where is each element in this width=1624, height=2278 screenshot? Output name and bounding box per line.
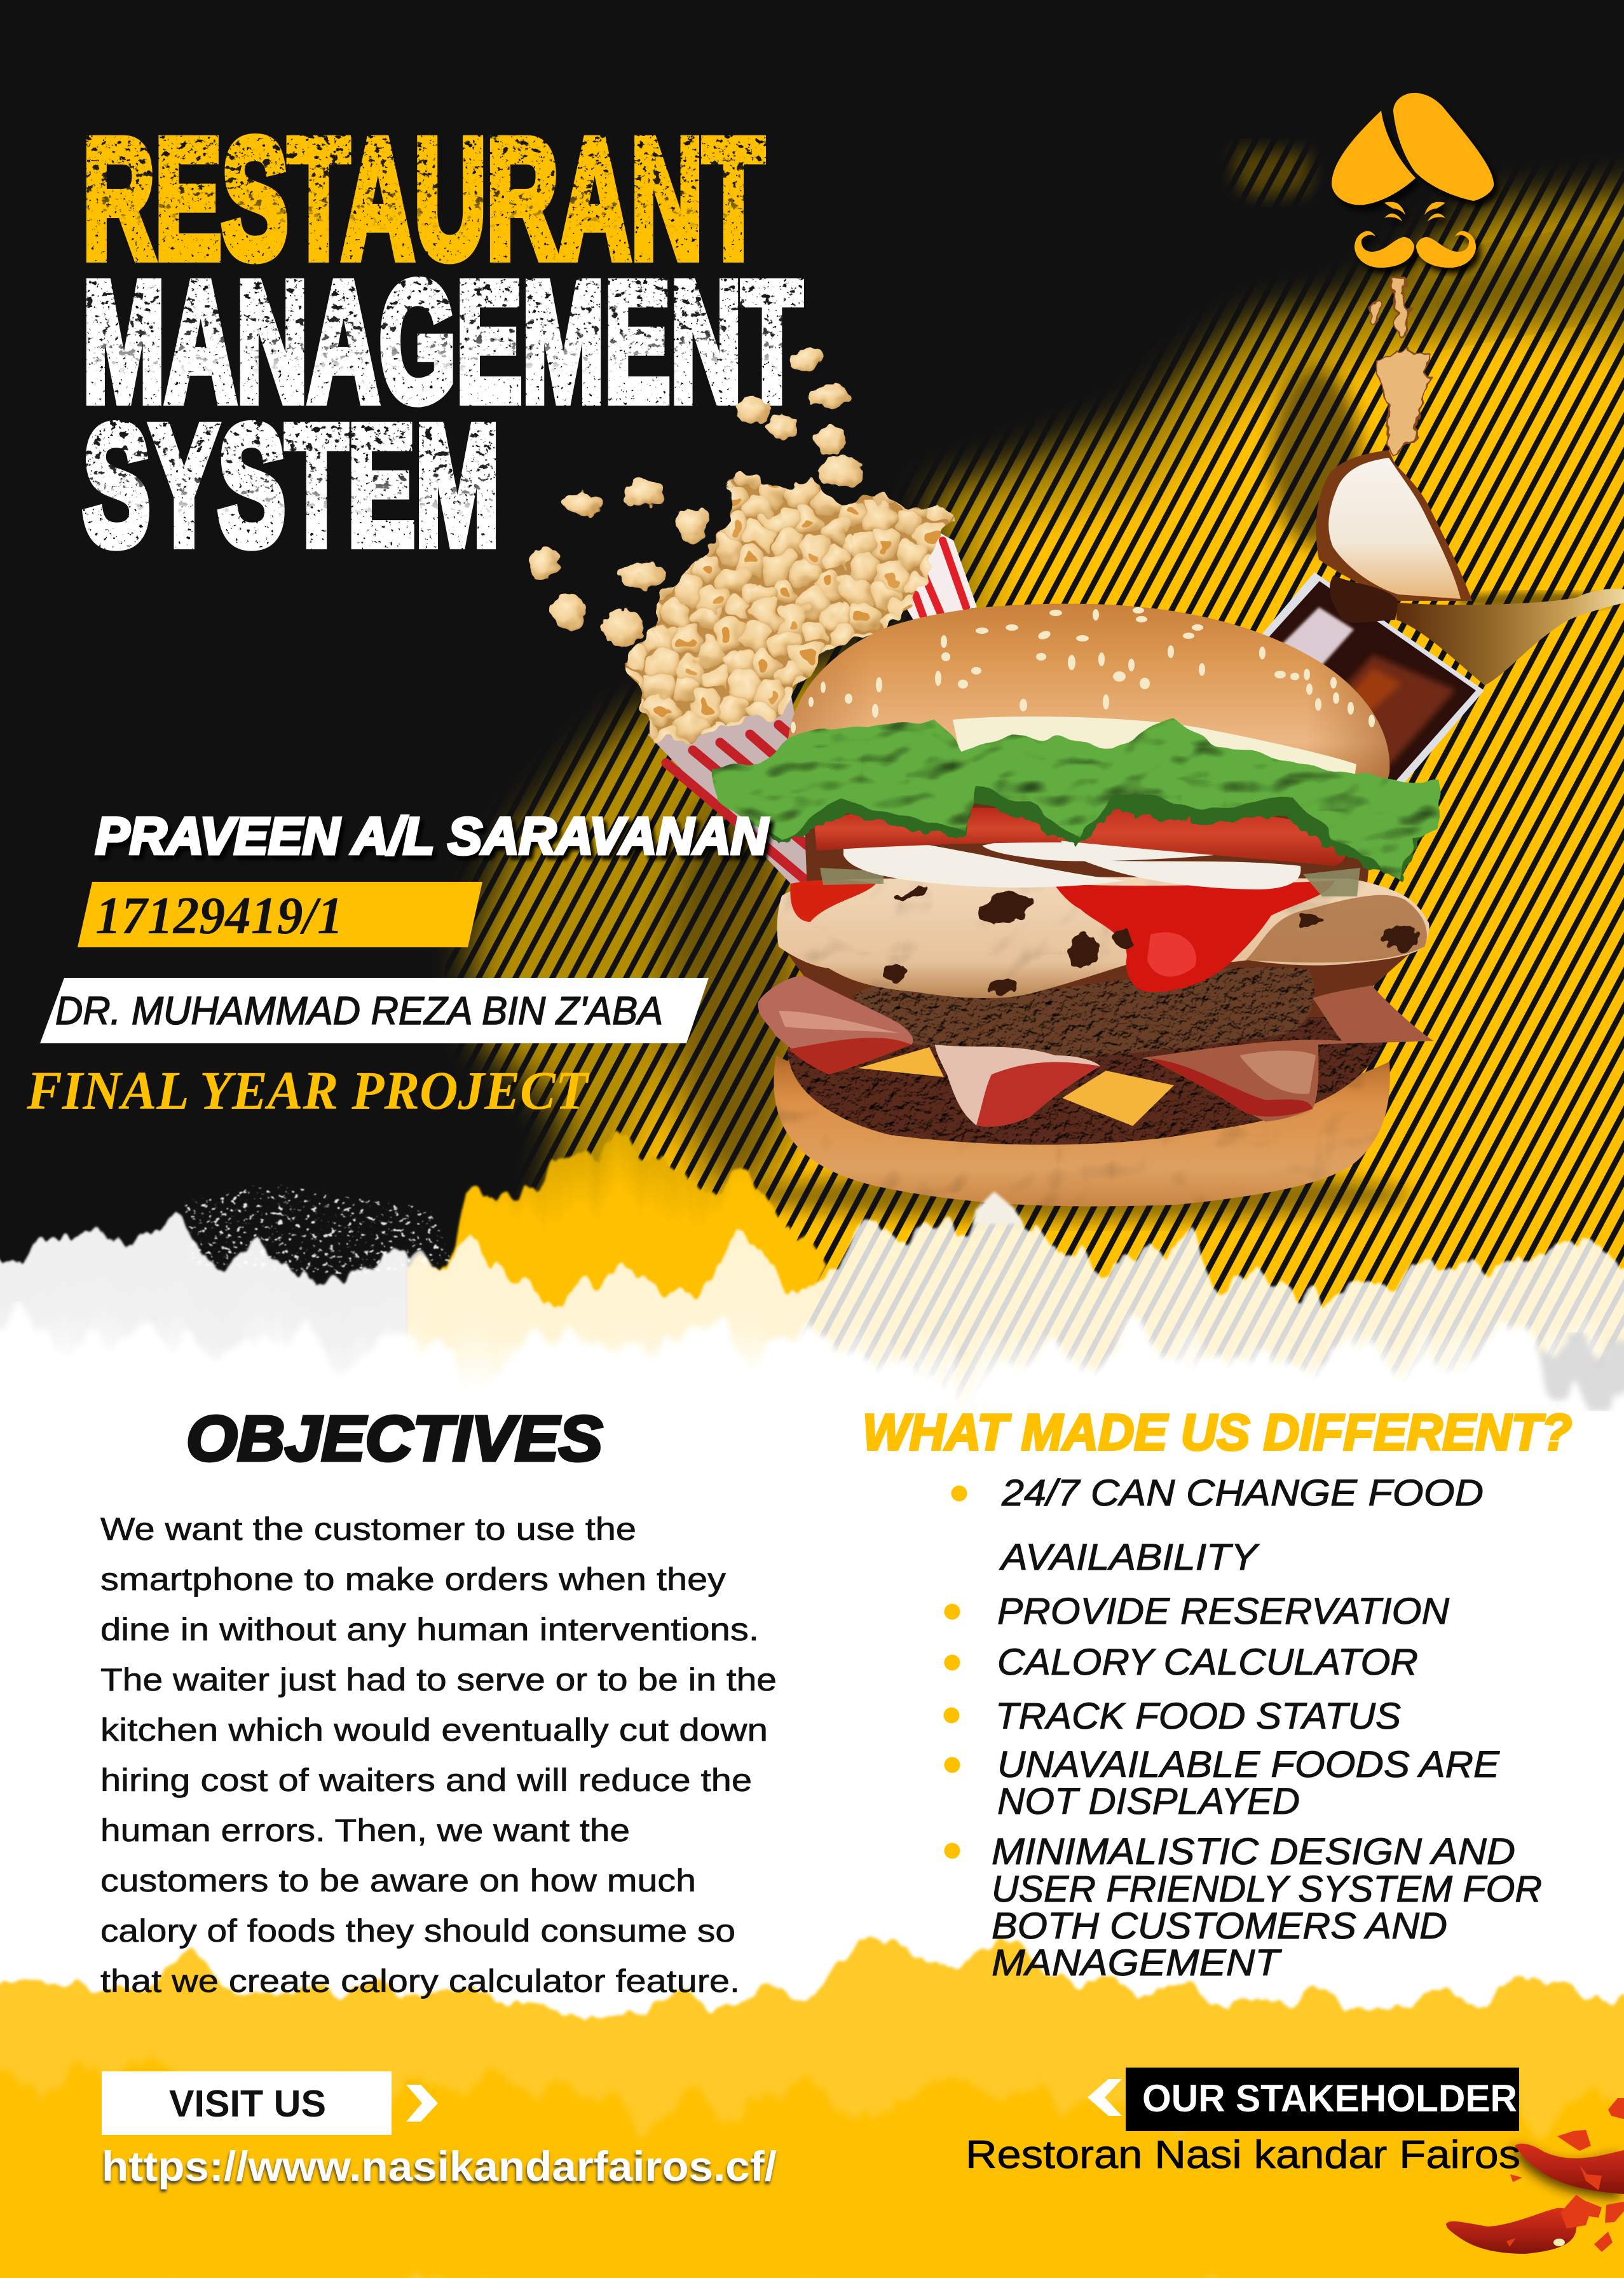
objectives body text: The waiter just had to serve or to be in the xyxy=(100,1662,777,1698)
popcorn bucket back xyxy=(648,532,977,888)
student name: PRAVEEN A/L SARAVANAN xyxy=(95,807,769,865)
bullets xyxy=(943,1485,967,1859)
burger: cheese slices xyxy=(1062,1071,1174,1126)
burger: lower patty xyxy=(788,1017,1383,1145)
differentiators list: AVAILABILITY xyxy=(999,1537,1260,1578)
splash droplets xyxy=(1371,277,1430,455)
differentiators list: NOT DISPLAYED xyxy=(997,1781,1300,1822)
differentiators list: PROVIDE RESERVATION xyxy=(997,1591,1449,1632)
burger: pickle slices xyxy=(820,868,884,885)
objectives heading: OBJECTIVES xyxy=(186,1403,603,1474)
title xyxy=(76,103,814,580)
differentiators list: 24/7 CAN CHANGE FOOD xyxy=(1001,1472,1484,1514)
title line: MANAGEMENT: MANAGEMENT xyxy=(83,246,802,437)
striped yellow brush region xyxy=(445,127,1624,1462)
burger: top bun xyxy=(788,604,1389,788)
white lower body panel xyxy=(0,1415,1624,2114)
foam splash xyxy=(1316,450,1472,601)
visit us button: VISIT US xyxy=(169,2083,326,2125)
visit us button xyxy=(102,2071,392,2135)
arrow: right chevron xyxy=(406,2085,438,2122)
title line: RESTAURANT: RESTAURANT xyxy=(83,103,764,294)
chili peppers xyxy=(1446,2098,1624,2254)
stakeholder heading box: OUR STAKEHOLDER xyxy=(1142,2077,1517,2120)
white cloud peak over bun xyxy=(972,1191,1023,1224)
objectives body text: dine in without any human interventions. xyxy=(100,1612,759,1647)
differentiators list: CALORY CALCULATOR xyxy=(997,1642,1418,1683)
loose popcorn kernels xyxy=(529,348,863,646)
final year project label: FINAL YEAR PROJECT xyxy=(26,1060,590,1121)
burger: ketchup xyxy=(1053,881,1335,992)
differentiators list: MANAGEMENT xyxy=(992,1942,1282,1984)
differentiators list: BOTH CUSTOMERS AND xyxy=(992,1905,1447,1947)
burger: sesame seeds xyxy=(791,607,1375,733)
burger: lettuce underside xyxy=(718,757,1433,881)
chili: lower xyxy=(1446,2208,1577,2254)
differentiators list xyxy=(943,1472,1542,1984)
burger: char spots xyxy=(882,884,1420,994)
burger xyxy=(708,604,1442,1206)
yellow torn paint footer xyxy=(0,1939,1624,2278)
glass cola core xyxy=(1316,655,1456,766)
right splash xyxy=(1396,589,1624,685)
student id badge: 17129419/1 xyxy=(95,886,343,945)
objectives body text: We want the customer to use the xyxy=(100,1511,636,1547)
objectives body text: hiring cost of waiters and will reduce the xyxy=(100,1762,752,1798)
glass highlight xyxy=(1265,607,1354,687)
burger: dark inner backing xyxy=(779,731,1424,1043)
burger: chicken fillet xyxy=(777,877,1430,998)
objectives body text: that we create calory calculator feature. xyxy=(100,1963,740,1999)
white specks over black xyxy=(184,1183,451,1275)
supervisor badge: DR. MUHAMMAD REZA BIN Z'ABA xyxy=(55,989,663,1033)
title grunge texture xyxy=(76,130,814,518)
what made us different heading: WHAT MADE US DIFFERENT? xyxy=(863,1404,1572,1460)
objectives body text: kitchen which would eventually cut down xyxy=(100,1712,768,1748)
burger: onion rings xyxy=(843,837,1300,889)
differentiators list: MINIMALISTIC DESIGN AND xyxy=(992,1831,1515,1872)
burger: mayonnaise xyxy=(953,717,1356,782)
grey wash at right of cloud xyxy=(1538,1341,1624,1402)
white torn paper cloud: translucent edge xyxy=(0,1208,1624,1462)
stakeholder name: Restoran Nasi kandar Fairos xyxy=(966,2133,1520,2177)
chili flakes xyxy=(1506,2098,1624,2252)
burger: lettuce xyxy=(708,719,1442,877)
differentiators list: TRACK FOOD STATUS xyxy=(995,1696,1401,1737)
objectives body text: customers to be aware on how much xyxy=(100,1863,696,1898)
website url: https://www.nasikandarfairos.cf/ xyxy=(102,2143,777,2190)
bucket left side xyxy=(648,696,820,888)
glass body xyxy=(1201,572,1484,827)
burger: bottom bun xyxy=(774,1055,1390,1206)
solid yellow paint blob xyxy=(407,1144,826,1462)
objectives body text: smartphone to make orders when they xyxy=(100,1561,726,1597)
objectives body text: human errors. Then, we want the xyxy=(100,1813,630,1848)
burger: bacon right xyxy=(1142,985,1433,1122)
burger: tomato slices xyxy=(814,807,1061,851)
cola glass and splash xyxy=(1201,277,1624,827)
burger: upper patty xyxy=(852,967,1314,1057)
stakeholder heading box xyxy=(1126,2068,1519,2131)
objectives body text: calory of foods they should consume so xyxy=(100,1913,735,1949)
icon: turban and moustache logo xyxy=(1332,93,1494,268)
differentiators list: USER FRIENDLY SYSTEM FOR xyxy=(992,1869,1542,1910)
arrow: left chevron xyxy=(1088,2079,1122,2116)
student id badge xyxy=(78,882,482,947)
popcorn pile xyxy=(622,473,953,743)
objectives body text xyxy=(100,1511,777,1999)
bucket right side xyxy=(904,532,977,623)
chili: upper xyxy=(1515,2144,1624,2194)
supervisor badge xyxy=(40,978,709,1043)
burger: bacon left xyxy=(758,976,913,1074)
differentiators list: UNAVAILABLE FOODS ARE xyxy=(997,1744,1500,1785)
burger: bacon centre xyxy=(935,1045,1100,1127)
title line: SYSTEM: SYSTEM xyxy=(83,390,500,580)
